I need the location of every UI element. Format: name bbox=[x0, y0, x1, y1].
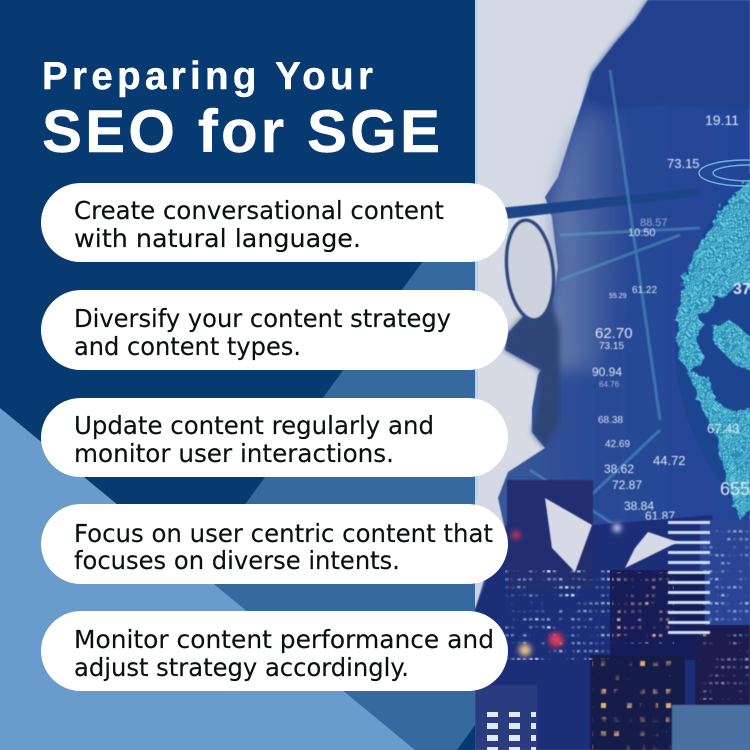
right tower windows bbox=[700, 525, 750, 625]
suit and dark mass bbox=[475, 514, 713, 750]
city skyline bbox=[475, 480, 750, 750]
overlay numbers: 62.70 bbox=[595, 325, 633, 342]
tip 3 bbox=[41, 398, 508, 477]
tip 5 bbox=[41, 611, 508, 691]
navy base bbox=[0, 0, 475, 750]
lower right windows bbox=[700, 630, 750, 700]
title line 1: Preparing Your bbox=[42, 55, 373, 98]
city windows bbox=[476, 515, 750, 750]
photo background bbox=[475, 0, 750, 750]
tip 3: Update content regularly and bbox=[74, 411, 434, 440]
orbit rings bbox=[699, 160, 750, 186]
glasses lens bbox=[502, 218, 558, 322]
overlay numbers: 88.57 bbox=[640, 217, 668, 229]
overlay numbers: 38.62 bbox=[604, 462, 634, 476]
overlay numbers: 73.15 bbox=[599, 341, 624, 352]
tip 3: monitor user interactions. bbox=[74, 439, 394, 468]
tip 2 bbox=[41, 290, 508, 370]
light blue corner bbox=[0, 408, 415, 750]
overlay numbers: 64.76 bbox=[599, 380, 620, 389]
overlay numbers: 67.43 bbox=[707, 421, 740, 436]
tip 5: Monitor content performance and bbox=[74, 625, 494, 654]
building lower mass bbox=[590, 655, 685, 750]
tip 1: with natural language. bbox=[74, 224, 361, 253]
left tower windows bbox=[505, 570, 610, 660]
tip 4 bbox=[41, 504, 508, 584]
overlay numbers bbox=[592, 114, 750, 565]
light glows bbox=[512, 524, 621, 656]
overlay numbers: 38.84 bbox=[624, 499, 654, 513]
bottom left windows bbox=[487, 712, 536, 750]
tip 4: Focus on user centric content that bbox=[74, 519, 493, 548]
building centre mass bbox=[610, 570, 705, 660]
tip 1 bbox=[41, 183, 508, 262]
overlay numbers: 42.69 bbox=[605, 439, 630, 450]
overlay numbers: 55.29 bbox=[609, 293, 627, 300]
centre warm windows bbox=[612, 572, 674, 644]
building bottom left bbox=[475, 685, 537, 750]
tip 4: focuses on diverse intents. bbox=[74, 546, 400, 575]
mid blue diagonal band bbox=[214, 262, 475, 750]
glasses arm bbox=[500, 188, 700, 219]
face highlight bbox=[543, 112, 615, 377]
tip 5: adjust strategy accordingly. bbox=[74, 653, 409, 682]
overlay numbers: 22.82 bbox=[678, 600, 703, 611]
title bbox=[42, 55, 440, 165]
lower warm windows bbox=[592, 660, 677, 750]
title line 2: SEO for SGE bbox=[42, 98, 440, 165]
building tall left bbox=[506, 480, 594, 526]
light edge strip bbox=[475, 0, 478, 500]
hair bbox=[586, 0, 750, 110]
data lines bbox=[529, 70, 700, 524]
overlay numbers: 61.22 bbox=[632, 285, 657, 296]
overlay numbers: 44.72 bbox=[653, 453, 686, 468]
photo: person in glasses with data overlay, globe and city bbox=[475, 0, 750, 750]
overlay numbers: 90.94 bbox=[592, 365, 622, 379]
building right blue bbox=[700, 520, 750, 630]
overlay numbers: 10.50 bbox=[628, 227, 656, 239]
building low teal bbox=[672, 705, 750, 750]
tip 1: Create conversational content bbox=[74, 196, 444, 225]
globe continents bbox=[677, 170, 750, 518]
overlay numbers: 73.15 bbox=[667, 156, 700, 171]
building bottom right bbox=[695, 625, 750, 705]
overlay numbers: 15.00 bbox=[696, 614, 729, 629]
striped building bbox=[668, 515, 710, 635]
overlay numbers: 19.11 bbox=[705, 112, 739, 128]
collar right bbox=[625, 532, 678, 568]
nose and lips shadow bbox=[505, 290, 560, 448]
collar left bbox=[545, 498, 592, 572]
overlay numbers: 72.87 bbox=[612, 478, 642, 492]
tip 2: Diversify your content strategy bbox=[74, 304, 451, 333]
left panel background bbox=[0, 262, 475, 750]
overlay numbers: 61.87 bbox=[645, 509, 675, 523]
tip list bbox=[41, 183, 508, 691]
tip 2: and content types. bbox=[74, 332, 301, 361]
head and shoulders silhouette bbox=[475, 0, 750, 750]
overlay numbers: 68.38 bbox=[598, 415, 623, 426]
globe bbox=[674, 173, 750, 520]
